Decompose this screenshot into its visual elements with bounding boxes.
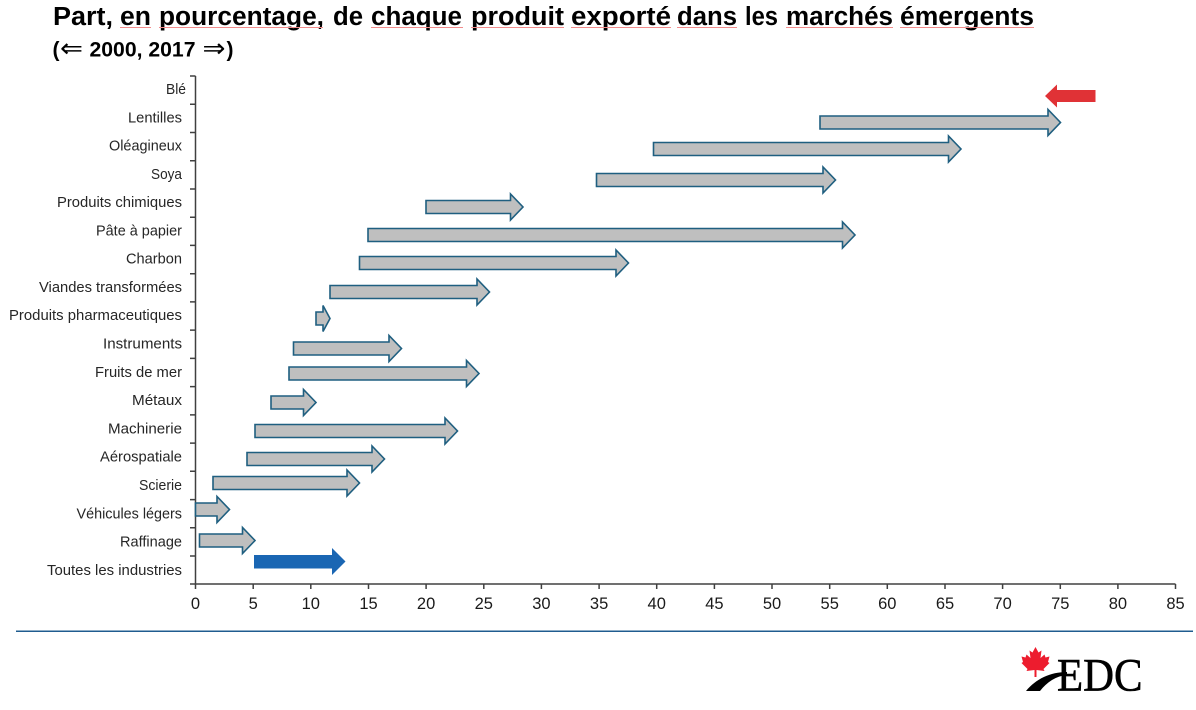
arrow: Soya	[596, 167, 836, 193]
arrow: Machinerie	[255, 418, 458, 444]
x axis numbers: 40	[648, 595, 666, 613]
x axis numbers	[191, 595, 1185, 613]
arrow: Produits chimiques	[426, 194, 523, 220]
x axis numbers: 15	[359, 595, 378, 613]
title: exporté	[571, 3, 671, 31]
arrow: Lentilles	[820, 110, 1060, 136]
x axis numbers: 5	[249, 595, 258, 613]
x axis numbers: 0	[191, 595, 200, 613]
subtitle: (	[52, 38, 60, 62]
icon: maple leaf	[1022, 647, 1050, 677]
arrow: Véhicules légers	[196, 496, 230, 522]
title: pourcentage,	[159, 3, 324, 31]
arrow: Charbon	[360, 250, 628, 276]
category labels: Viandes transformées	[39, 280, 182, 296]
x axis numbers: 60	[878, 595, 896, 613]
arrow: Pâte à papier	[368, 222, 855, 248]
footer divider	[16, 630, 1193, 632]
x axis numbers: 65	[936, 595, 954, 613]
title: produit	[471, 3, 565, 31]
arrow: Toutes les industries (blue)	[254, 548, 346, 575]
category labels: Oléagineux	[109, 138, 183, 154]
category labels: Blé	[166, 82, 186, 98]
arrow: Produits pharmaceutiques	[316, 306, 330, 332]
arrow: Scierie	[213, 470, 360, 496]
category labels: Pâte à papier	[96, 224, 182, 240]
x axis numbers: 10	[302, 595, 320, 613]
logo wordmark: EDC	[1057, 650, 1142, 702]
x axis numbers: 80	[1109, 595, 1127, 613]
title: marchés	[786, 3, 893, 31]
category labels: Raffinage	[120, 534, 182, 550]
category labels: Produits pharmaceutiques	[9, 308, 182, 324]
arrow: Oléagineux	[654, 136, 961, 162]
logo: EDC	[1022, 647, 1142, 702]
category labels: Toutes les industries	[47, 563, 182, 579]
arrow: Métaux	[271, 390, 316, 416]
subtitle: ⇒	[202, 34, 226, 64]
arrow: Viandes transformées	[330, 279, 490, 305]
x axis numbers: 75	[1051, 595, 1069, 613]
title: dans	[677, 3, 737, 31]
category labels	[9, 82, 186, 579]
x axis numbers: 35	[590, 595, 608, 613]
x axis numbers: 30	[532, 595, 551, 613]
x axis numbers: 85	[1166, 595, 1185, 613]
category labels: Véhicules légers	[76, 506, 182, 522]
x axis numbers: 20	[417, 595, 435, 613]
subtitle: 2000, 2017	[90, 38, 196, 62]
x axis numbers: 25	[475, 595, 493, 613]
chart axes	[190, 76, 1176, 589]
subtitle: )	[226, 38, 234, 62]
category labels: Instruments	[103, 336, 182, 352]
category labels: Lentilles	[128, 110, 182, 126]
title	[53, 3, 1034, 31]
arrow: Instruments	[294, 336, 402, 362]
category labels: Produits chimiques	[57, 195, 182, 211]
x axis numbers: 70	[993, 595, 1012, 613]
arrow: Raffinage	[200, 528, 255, 554]
subtitle	[52, 34, 234, 64]
x axis numbers: 50	[763, 595, 781, 613]
title: émergents	[900, 3, 1034, 31]
category labels: Soya	[151, 167, 183, 183]
arrow: Aérospatiale	[247, 446, 384, 472]
subtitle: ⇐	[60, 34, 83, 64]
x axis numbers: 55	[821, 595, 839, 613]
category labels: Fruits de mer	[95, 365, 182, 381]
arrow: Blé (red, decreasing)	[1045, 84, 1096, 108]
title: de	[333, 3, 363, 31]
title: en	[120, 3, 151, 31]
category labels: Scierie	[139, 478, 182, 494]
category labels: Métaux	[132, 393, 183, 409]
x axis numbers: 45	[705, 595, 724, 613]
category labels: Aérospatiale	[100, 450, 182, 466]
title: les	[745, 3, 778, 31]
logo swoosh	[1026, 672, 1067, 691]
title: chaque	[371, 3, 462, 31]
title: Part,	[53, 3, 113, 31]
arrow: Fruits de mer	[289, 360, 479, 386]
category labels: Charbon	[126, 252, 182, 268]
category labels: Machinerie	[108, 422, 182, 438]
